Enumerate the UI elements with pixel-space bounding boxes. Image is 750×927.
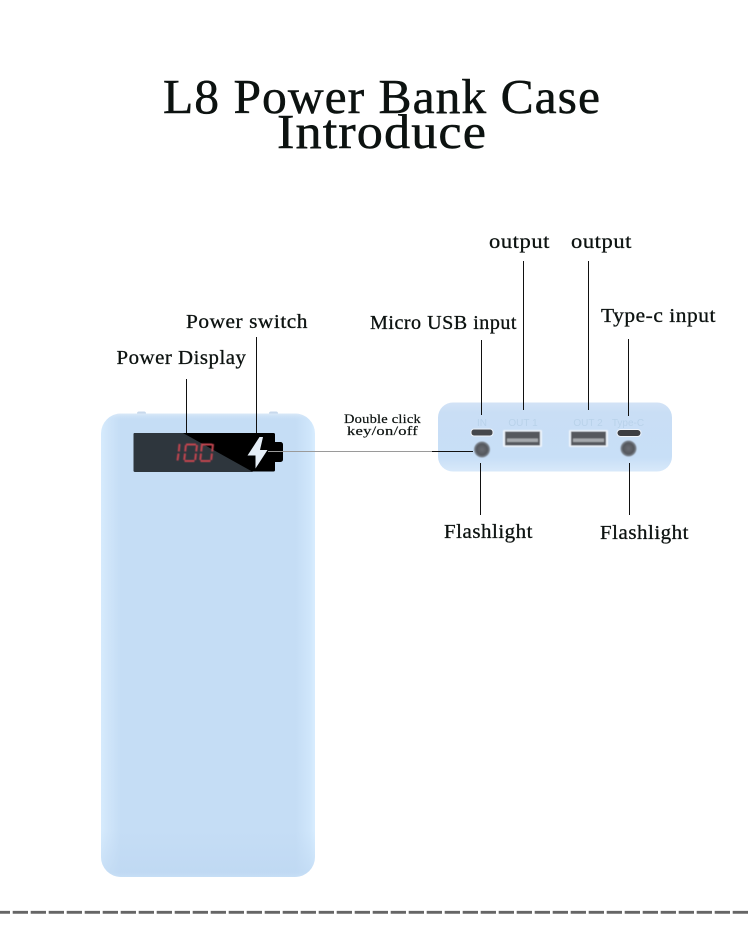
label: Double click [344,411,421,438]
dashed divider [0,911,750,914]
label: Flashlight left: Flashlight [444,521,533,543]
icon: lightning bolt [248,437,268,468]
battery display [134,433,283,472]
label: Power switch: Power switch [186,311,308,333]
label: Flashlight right: Flashlight [600,522,689,544]
port labels [477,418,644,429]
port labels: Type-C [612,418,644,429]
port labels: IN [477,418,487,429]
USB port OUT 1 [503,430,542,447]
flashlight left [474,442,490,458]
title: Introduce [277,104,487,159]
micro USB port [471,429,493,436]
panel: power bank end view [438,402,672,472]
label: Micro USB input: Micro USB input [370,312,517,334]
Type-C port [617,430,641,436]
title: L8 Power Bank Case [163,69,601,124]
callout lines [186,261,630,515]
top buttons [137,412,278,416]
label: Double click: Double click [344,411,421,426]
USB port OUT 2 [569,430,608,447]
label: Double click: key/on/off [347,423,419,438]
port labels: OUT 1 [508,418,538,429]
label: Type-c input: Type-c input [601,305,716,327]
power bank body [101,414,315,877]
label: output 2: output [571,231,632,253]
label: output 1: output [489,231,550,253]
LED digits 100 [178,444,213,461]
port labels: OUT 2 [573,418,603,429]
title [163,69,601,159]
panel: power bank front view [101,412,315,877]
end body [438,402,672,472]
label: Power Display: Power Display [116,347,246,369]
flashlight right [620,440,636,456]
